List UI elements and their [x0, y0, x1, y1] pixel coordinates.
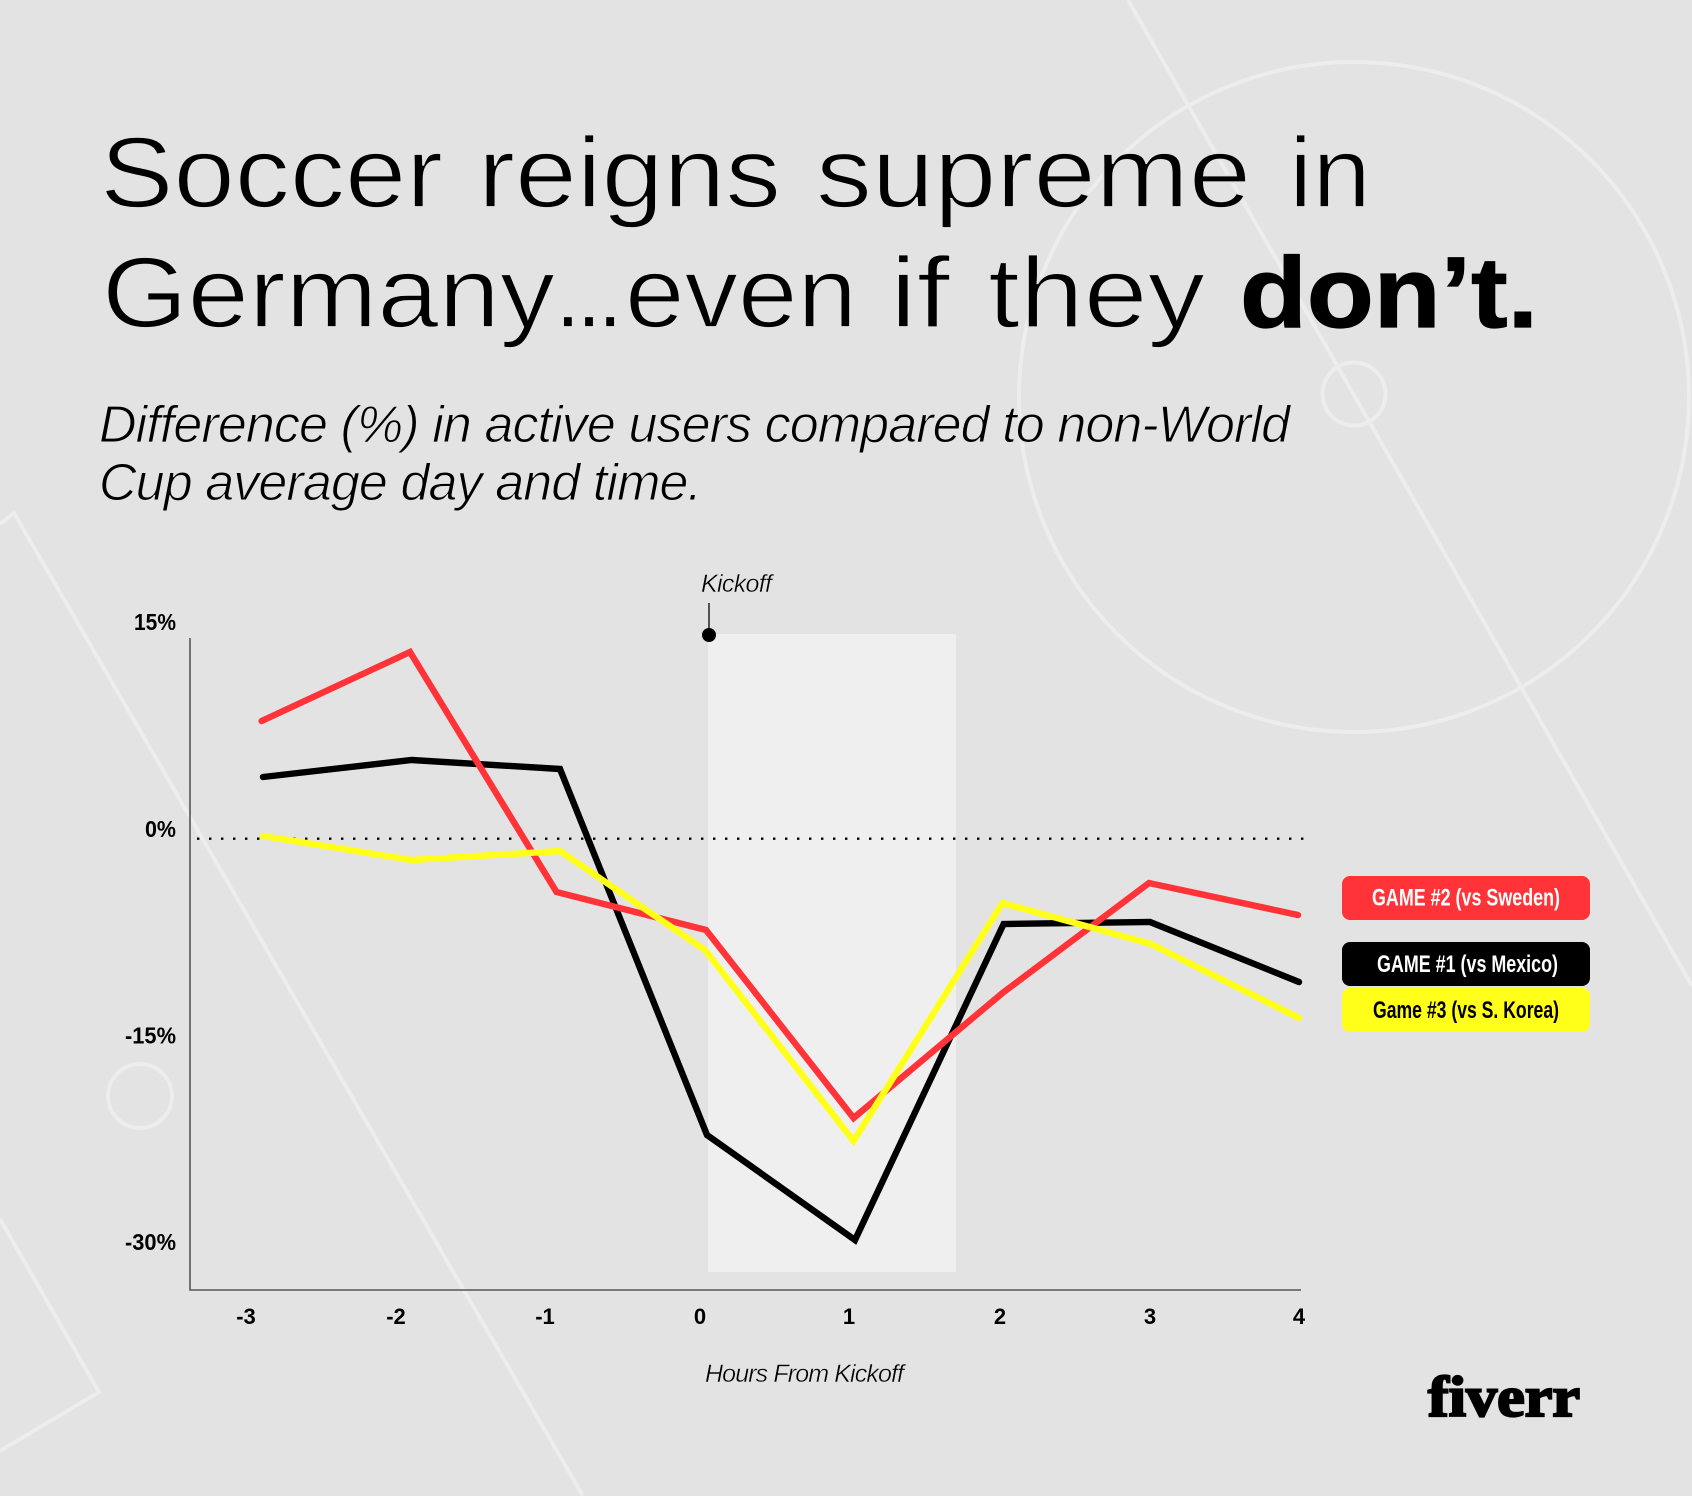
x axis labels: -1 — [535, 1304, 555, 1329]
legend item: game 1: GAME #1 (vs Mexico) — [1377, 951, 1558, 978]
x axis labels: 2 — [994, 1304, 1006, 1329]
x axis labels: 1 — [843, 1304, 855, 1329]
y axis labels — [125, 609, 176, 1255]
subtitle: Cup average day and time. — [99, 454, 702, 512]
legend item: game 3: Game #3 (vs S. Korea) — [1373, 997, 1559, 1024]
legend — [1342, 876, 1590, 1032]
legend item: game 2: GAME #2 (vs Sweden) — [1372, 884, 1560, 912]
y axis labels: 0% — [145, 816, 176, 842]
kickoff marker: Kickoff — [701, 570, 775, 598]
title: don’t. — [1240, 237, 1538, 349]
subtitle — [99, 396, 1292, 512]
title: Germany — [102, 237, 555, 349]
y axis labels: -30% — [125, 1229, 176, 1255]
series: game 3 vs S. Korea — [263, 836, 1299, 1141]
x axis labels: 3 — [1144, 1304, 1156, 1329]
title: Soccer — [100, 117, 443, 229]
chart axes — [190, 638, 1301, 1290]
x axis labels: -3 — [236, 1304, 256, 1329]
zero reference dotted line — [197, 838, 1306, 840]
series: game 2 vs Sweden — [262, 652, 1298, 1118]
title: ... — [554, 237, 624, 349]
x axis labels: -2 — [386, 1304, 406, 1329]
x axis labels: 0 — [694, 1304, 706, 1329]
fiverr logo: fiverr — [1428, 1366, 1580, 1429]
x axis title: Hours From Kickoff — [705, 1360, 907, 1388]
line chart: game results — [262, 652, 1299, 1240]
title: they — [988, 237, 1205, 349]
title: reigns — [478, 117, 781, 229]
y axis labels: 15% — [134, 609, 176, 635]
legend item: game 3 — [1342, 988, 1590, 1032]
title: in — [1289, 117, 1371, 229]
series: game 1 vs Mexico — [263, 760, 1299, 1240]
x axis labels — [236, 1304, 1306, 1329]
subtitle: Difference (%) in active users compared to non-World — [99, 396, 1292, 454]
kickoff highlight band — [708, 634, 956, 1272]
y axis labels: -15% — [125, 1022, 176, 1048]
title: supreme — [816, 117, 1251, 229]
kickoff marker — [701, 570, 775, 642]
legend item: game 1 — [1342, 942, 1590, 986]
title — [100, 117, 1538, 349]
title: if — [890, 237, 950, 349]
title: even — [625, 237, 857, 349]
legend item: game 2 — [1342, 876, 1590, 920]
x axis labels: 4 — [1293, 1304, 1306, 1329]
